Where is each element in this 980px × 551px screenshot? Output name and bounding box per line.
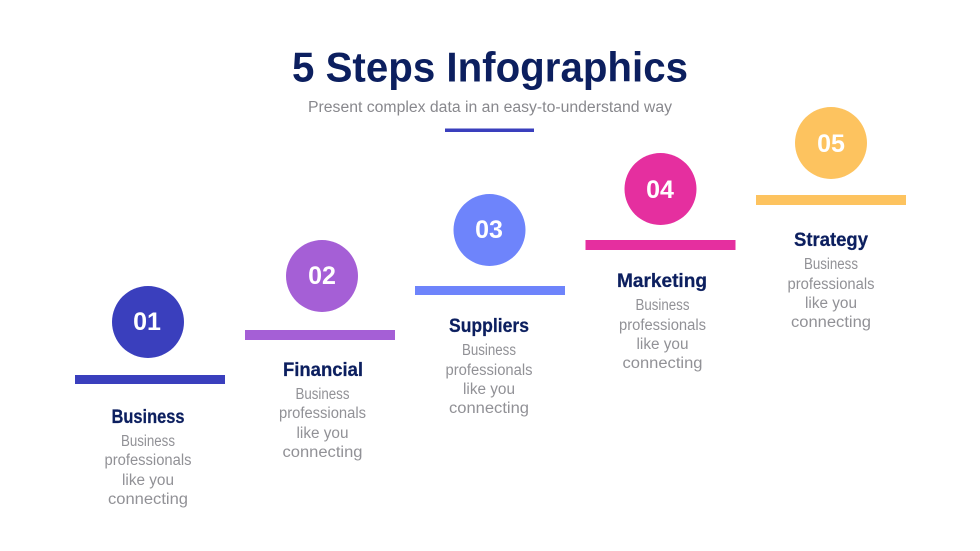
step 1 text: like you (122, 472, 174, 489)
step 2 text: professionals (279, 405, 366, 422)
step 1 text: Business (121, 433, 175, 450)
step 3 text: like you (463, 381, 515, 398)
step 1: business (75, 286, 225, 508)
step 2: financial (245, 240, 395, 461)
step 4 number: 04 (646, 176, 674, 204)
step 1 heading: Business (112, 407, 184, 428)
step 4 text: Business (636, 297, 690, 314)
step 4 heading: Marketing (617, 271, 707, 292)
step 4 circle (624, 153, 696, 225)
step 2 text: connecting (282, 444, 362, 461)
step 2 bar (245, 330, 395, 340)
subtitle: Present complex data in an easy-to-understand way (308, 99, 672, 116)
step 4 text: like you (636, 336, 688, 353)
step 1 circle (112, 286, 184, 358)
step 4 text (619, 297, 706, 372)
step 3 text (446, 342, 533, 417)
step 2 circle (286, 240, 358, 312)
step 2 text: like you (296, 425, 348, 442)
step 2 text: Business (296, 386, 350, 403)
step 5 number: 05 (817, 130, 845, 158)
step 3 number: 03 (475, 216, 503, 244)
step 3 bar (415, 286, 565, 295)
step 2 text (279, 386, 366, 461)
title underline (445, 128, 534, 132)
step 4 text: professionals (619, 317, 706, 334)
step 3 text: Business (462, 342, 516, 359)
step 5: strategy (756, 107, 906, 331)
step 5 heading: Strategy (794, 230, 868, 251)
step 3 text: connecting (449, 400, 529, 417)
title: 5 Steps Infographics (292, 44, 688, 90)
step 3 circle (454, 194, 526, 266)
step 5 text: connecting (791, 314, 871, 331)
step 5 text: Business (804, 256, 858, 273)
step 3 text: professionals (446, 362, 533, 379)
step 3: suppliers (415, 194, 565, 417)
step 1 bar (75, 375, 225, 384)
step 1 text: connecting (108, 491, 188, 508)
step 2 number: 02 (308, 262, 336, 290)
step 4 text: connecting (622, 355, 702, 372)
step 4: marketing (586, 153, 736, 372)
step 1 text: professionals (104, 452, 192, 469)
step 5 text: like you (805, 295, 857, 312)
step 1 text (104, 433, 192, 508)
step 2 heading: Financial (283, 360, 363, 381)
step 5 circle (795, 107, 867, 179)
step 4 bar (586, 240, 736, 250)
step 5 text (788, 256, 875, 331)
step 5 text: professionals (788, 276, 875, 293)
step 1 number: 01 (133, 308, 161, 336)
step 5 bar (756, 195, 906, 205)
step 3 heading: Suppliers (449, 316, 529, 337)
